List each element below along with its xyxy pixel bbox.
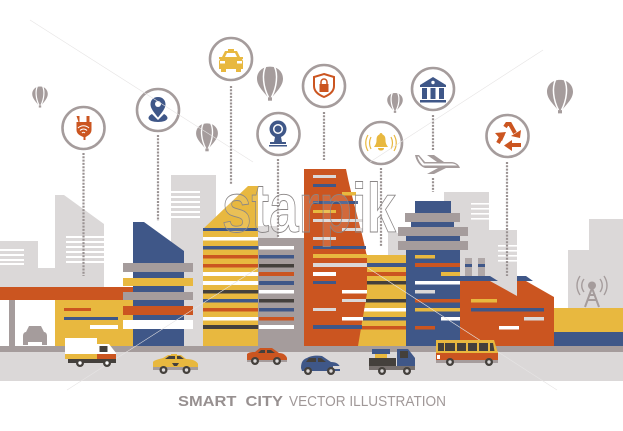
right low block bbox=[554, 308, 623, 346]
icon circle: location pin bbox=[137, 89, 179, 131]
balloons bbox=[32, 67, 573, 151]
title bbox=[178, 393, 446, 410]
icon circle: recycle bbox=[486, 115, 528, 157]
road bbox=[0, 346, 623, 381]
icon circle: smart plug bbox=[62, 107, 104, 149]
white delivery truck bbox=[65, 338, 116, 367]
flatbed truck bbox=[369, 349, 415, 375]
icon circle: bank bbox=[412, 68, 454, 110]
orange bus bbox=[436, 340, 498, 366]
gray striped building bbox=[258, 238, 304, 346]
yellow taxi bbox=[153, 354, 198, 374]
elevated orange bridge and yellow block bbox=[0, 287, 133, 346]
dotted connectors bbox=[84, 86, 507, 276]
blue car bbox=[301, 356, 340, 375]
parked car silhouette bbox=[23, 326, 47, 345]
background skyline bbox=[0, 175, 623, 346]
navy tiered tower bbox=[398, 201, 468, 346]
airplane bbox=[415, 155, 460, 174]
icon: antenna bbox=[577, 276, 607, 307]
red car bbox=[247, 348, 287, 365]
icon circle: taxi bbox=[210, 38, 252, 80]
yellow striped tower bbox=[203, 186, 258, 346]
orange curved tower bbox=[304, 169, 367, 346]
icon circle: security shield bbox=[303, 65, 345, 107]
title: SMART CITY bbox=[178, 393, 283, 410]
factory bbox=[460, 258, 554, 346]
icon circle: alarm bell bbox=[360, 122, 402, 164]
title: VECTOR ILLUSTRATION bbox=[289, 393, 446, 410]
watermark: starpik bbox=[222, 169, 396, 247]
icon circle: webcam bbox=[258, 113, 300, 155]
navy stacked building bbox=[123, 222, 193, 346]
yellow striped low block bbox=[350, 255, 406, 346]
